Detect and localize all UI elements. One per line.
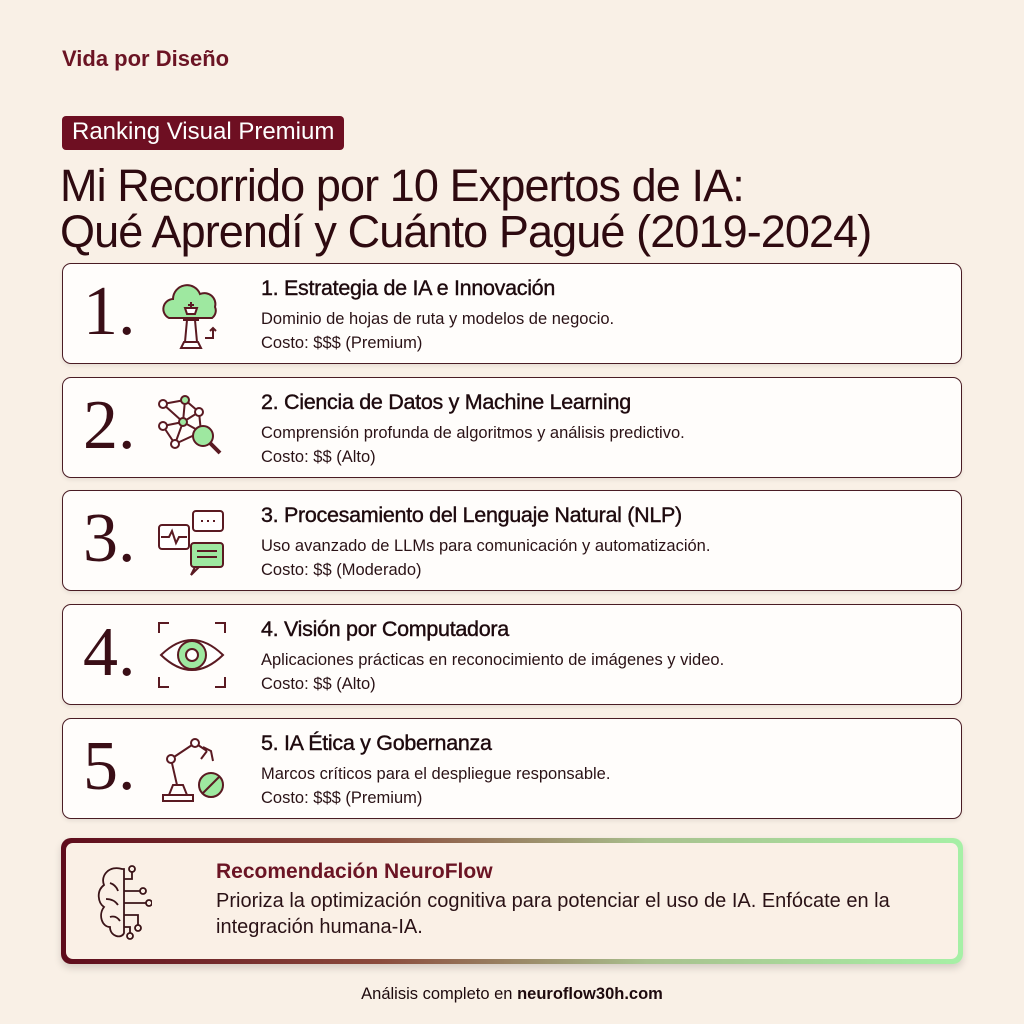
text: Costo: $$$ (Premium) bbox=[261, 334, 422, 352]
text: 5. IA Ética y Gobernanza bbox=[261, 731, 492, 755]
text: Uso avanzado de LLMs para comunicación y automatización. bbox=[261, 537, 710, 555]
card 1 bbox=[62, 263, 962, 364]
card 2 bbox=[62, 377, 962, 478]
card 5: 5. bbox=[83, 728, 136, 805]
text bbox=[261, 503, 710, 579]
icon: eye bbox=[158, 622, 226, 688]
card 3 bbox=[62, 490, 962, 591]
card 1: 1. bbox=[83, 273, 136, 350]
text: Marcos críticos para el despliegue responsable. bbox=[261, 765, 610, 783]
text: Aplicaciones prácticas en reconocimiento de imágenes y video. bbox=[261, 651, 724, 669]
card 2: 2. bbox=[83, 387, 136, 464]
title: Mi Recorrido por 10 Expertos de IA: bbox=[60, 160, 744, 211]
brand label: Vida por Diseño bbox=[62, 46, 229, 71]
text: Costo: $$ (Alto) bbox=[261, 675, 376, 693]
card 5 bbox=[62, 718, 962, 819]
title bbox=[60, 160, 871, 257]
text bbox=[261, 617, 724, 693]
text: Dominio de hojas de ruta y modelos de negocio. bbox=[261, 310, 614, 328]
text: 3. Procesamiento del Lenguaje Natural (NLP) bbox=[261, 503, 682, 527]
card 3: 3. bbox=[83, 500, 136, 577]
icon: brain bbox=[98, 865, 152, 940]
callout: recommendation bbox=[61, 838, 963, 964]
title: Qué Aprendí y Cuánto Pagué (2019-2024) bbox=[60, 206, 871, 257]
text bbox=[261, 276, 614, 352]
text bbox=[261, 390, 685, 466]
callout heading: Recomendación NeuroFlow bbox=[216, 860, 493, 883]
text: 2. Ciencia de Datos y Machine Learning bbox=[261, 390, 631, 414]
icon: cloud chess bbox=[162, 284, 217, 349]
card 4: 4. bbox=[83, 614, 136, 691]
text: Costo: $$ (Moderado) bbox=[261, 561, 422, 579]
text: Comprensión profunda de algoritmos y análisis predictivo. bbox=[261, 424, 685, 442]
text: Costo: $$ (Alto) bbox=[261, 448, 376, 466]
callout text: Prioriza la optimización cognitiva para potenciar el uso de IA. Enfócate en la integración humana-IA. bbox=[216, 890, 890, 938]
footer: Análisis completo en neuroflow30h.com bbox=[361, 985, 663, 1003]
badge: Ranking Visual Premium bbox=[72, 118, 334, 145]
text: Costo: $$$ (Premium) bbox=[261, 789, 422, 807]
text: 1. Estrategia de IA e Innovación bbox=[261, 276, 555, 300]
icon: chat bubbles bbox=[158, 510, 224, 576]
icon: network magnifier bbox=[158, 395, 222, 454]
card 4 bbox=[62, 604, 962, 705]
text bbox=[261, 731, 610, 807]
icon: robot arm bbox=[162, 738, 224, 802]
text: 4. Visión por Computadora bbox=[261, 617, 509, 641]
